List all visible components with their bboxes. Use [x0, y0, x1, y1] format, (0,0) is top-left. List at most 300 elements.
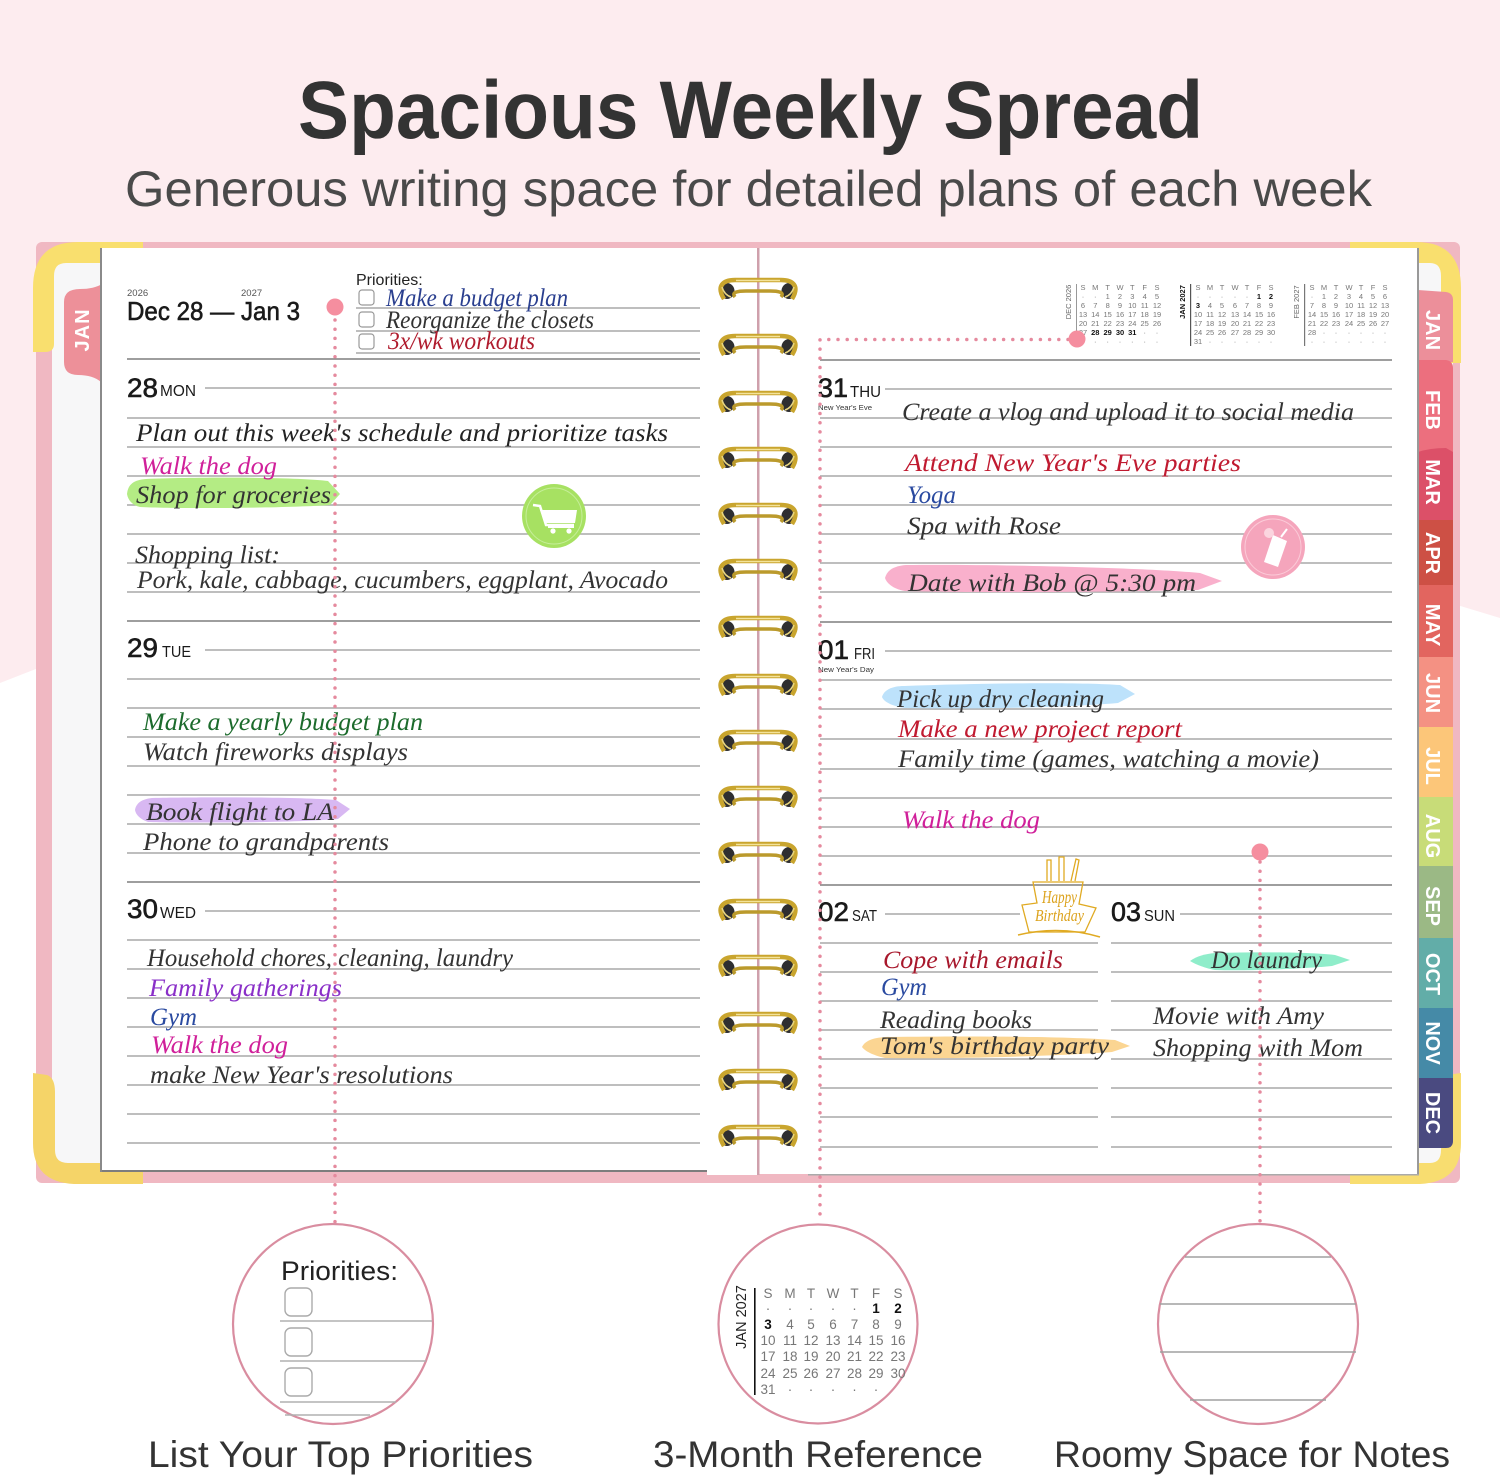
January 2027 calendar: 8 [1257, 301, 1261, 310]
callout circle: calendar: · [852, 1301, 857, 1316]
January 2027 calendar: · [1246, 337, 1248, 346]
callout circle: calendar: · [809, 1382, 813, 1397]
callout circle: calendar: · [809, 1301, 813, 1316]
callout circle: calendar: 15 [868, 1333, 884, 1348]
left page heavy dividers [127, 359, 700, 882]
February 2027 calendar: · [1384, 328, 1386, 337]
January 2027 calendar: · [1197, 292, 1199, 301]
February 2027 calendar: 11 [1357, 301, 1365, 310]
callout circle: calendar: 22 [868, 1349, 884, 1364]
January 2027 calendar: 9 [1269, 301, 1273, 310]
December 2026 calendar [1064, 283, 1161, 346]
caption: calendar: 3-Month Reference [653, 1434, 983, 1475]
callout circle: calendar: T [807, 1286, 815, 1301]
January 2027 calendar: T [1220, 283, 1225, 292]
title: Spacious Weekly Spread [298, 65, 1203, 156]
January 2027 calendar: 4 [1208, 301, 1212, 310]
February 2027 calendar: 28 [1308, 328, 1316, 337]
callout circle: calendar: 4 [786, 1317, 794, 1332]
February 2027 calendar: · [1348, 328, 1350, 337]
February 2027 calendar: 25 [1357, 319, 1365, 328]
December 2026 calendar: · [1106, 337, 1109, 346]
January 2027 calendar: 23 [1267, 319, 1275, 328]
callout circle: calendar: · [788, 1382, 792, 1397]
February 2027 calendar: 22 [1320, 319, 1328, 328]
January 2027 calendar: 11 [1206, 310, 1214, 319]
February 2027 calendar: · [1372, 337, 1374, 346]
February 2027 calendar: · [1335, 328, 1337, 337]
February 2027 calendar: 8 [1322, 301, 1326, 310]
day: 01 Friday: Make a new project report [897, 716, 1183, 743]
day: 31 Thursday: 31 [818, 373, 848, 403]
tab NOV: NOV [1421, 1021, 1443, 1065]
February 2027 calendar: 13 [1381, 301, 1389, 310]
December 2026 calendar: 14 [1091, 310, 1099, 319]
February 2027 calendar: 18 [1357, 310, 1365, 319]
December 2026 calendar: 30 [1116, 328, 1124, 337]
December 2026 calendar: · [1094, 337, 1097, 346]
day: 28 Monday: Plan out this week's schedule and prioritize tasks [135, 420, 668, 447]
January 2027 calendar: · [1221, 292, 1223, 301]
February 2027 calendar: 7 [1310, 301, 1314, 310]
December 2026 calendar: 23 [1116, 319, 1124, 328]
December 2026 calendar: 29 [1104, 328, 1112, 337]
day: 28 Monday: Shopping list: [135, 542, 280, 569]
left page [100, 248, 758, 1175]
callout circle: calendar: 10 [760, 1333, 776, 1348]
callout circle: calendar: 16 [890, 1333, 906, 1348]
callout circle: calendar: 9 [894, 1317, 902, 1332]
February 2027 calendar: 20 [1381, 310, 1389, 319]
December 2026 calendar: 22 [1104, 319, 1112, 328]
January 2027 calendar: 27 [1231, 328, 1239, 337]
callout circle: calendar: S [893, 1286, 903, 1301]
callout circle: calendar: 30 [890, 1366, 906, 1381]
February 2027 calendar: · [1311, 292, 1313, 301]
day: 03 Sunday: SUN [1144, 908, 1175, 925]
priorities box: Make a budget plan [385, 285, 568, 312]
priorities box [356, 272, 594, 355]
callout circle: calendar: 28 [847, 1366, 862, 1381]
left page ruled lines [127, 308, 700, 1143]
February 2027 calendar: 9 [1334, 301, 1338, 310]
December 2026 calendar: 2 [1118, 292, 1122, 301]
yellow metal corners [33, 242, 1461, 1184]
February 2027 calendar: 3 [1347, 292, 1351, 301]
callout circle: calendar: · [852, 1382, 857, 1397]
December 2026 calendar: T [1105, 283, 1110, 292]
date range header: Dec 28 — Jan 3 [127, 296, 300, 326]
day: 01 Friday: New Year's Day [818, 665, 874, 674]
day: 31 Thursday: Spa with Rose [907, 513, 1061, 540]
February 2027 calendar: 27 [1381, 319, 1389, 328]
December 2026 calendar: 17 [1128, 310, 1136, 319]
December 2026 calendar: 16 [1116, 310, 1124, 319]
December 2026 calendar: · [1156, 328, 1158, 337]
February 2027 calendar: 2 [1334, 292, 1338, 301]
December 2026 calendar: 24 [1128, 319, 1136, 328]
day: 31 Thursday: THU [850, 384, 881, 401]
day: 02 Saturday: 02 [818, 897, 849, 927]
callout circle: calendar: 11 [783, 1333, 797, 1348]
January 2027 calendar [1178, 283, 1275, 346]
day: 29 Tuesday: Book flight to LA [146, 799, 335, 826]
callout circle: calendar: 31 [760, 1382, 776, 1397]
day: 30 Wednesday [127, 894, 514, 1089]
day: 01 Friday: Family time (games, watching a movie) [897, 746, 1319, 773]
January 2027 calendar: 21 [1243, 319, 1251, 328]
day: 03 Sunday: Do laundry [1210, 947, 1323, 974]
February 2027 calendar: W [1345, 283, 1353, 292]
February 2027 calendar: · [1360, 328, 1362, 337]
day: 29 Tuesday: 29 [127, 633, 158, 663]
January 2027 calendar: · [1258, 337, 1260, 346]
February 2027 calendar: F [1371, 283, 1376, 292]
day: 01 Friday: Walk the dog [902, 807, 1040, 834]
tab JUN: JUN [1421, 673, 1443, 713]
icon: birthday cake [1018, 857, 1100, 937]
December 2026 calendar: · [1131, 337, 1134, 346]
callout circle: calendar: · [788, 1301, 792, 1316]
tab DEC: DEC [1421, 1092, 1443, 1134]
February 2027 calendar: 10 [1345, 301, 1353, 310]
January 2027 calendar: F [1257, 283, 1262, 292]
January 2027 calendar: 17 [1194, 319, 1202, 328]
day: 31 Thursday: New Year's Eve [818, 403, 872, 412]
highlighter marks [127, 478, 1350, 1058]
January 2027 calendar: 10 [1194, 310, 1202, 319]
January 2027 calendar: · [1246, 292, 1248, 301]
tab JUN [1418, 657, 1453, 727]
callout circle: priorities [233, 1224, 433, 1424]
spiral binding [720, 280, 796, 1146]
tab FEB [1418, 360, 1453, 452]
priorities box: Priorities: [356, 272, 423, 289]
February 2027 calendar: 14 [1308, 310, 1316, 319]
February 2027 calendar: 24 [1345, 319, 1353, 328]
December 2026 calendar: M [1092, 283, 1098, 292]
callout circle: calendar: S [763, 1286, 773, 1301]
December 2026 calendar: 12 [1153, 301, 1161, 310]
February 2027 calendar: · [1335, 337, 1337, 346]
February 2027 calendar: 26 [1369, 319, 1377, 328]
tab JAN [1418, 290, 1453, 362]
callout circle: calendar: 8 [872, 1317, 880, 1332]
day: 28 Monday [127, 373, 668, 594]
callout circle: calendar: 14 [847, 1333, 862, 1348]
February 2027 calendar: S [1309, 283, 1315, 292]
January 2027 calendar: 1 [1257, 292, 1261, 301]
caption: priorities: List Your Top Priorities [148, 1434, 533, 1475]
callout circle: calendar [718, 1224, 918, 1424]
spine [757, 248, 760, 1175]
date range header: 2026 [127, 288, 148, 299]
day: 31 Thursday: Create a vlog and upload it to social media [902, 399, 1354, 426]
February 2027 calendar: · [1372, 328, 1374, 337]
February 2027 calendar: 23 [1332, 319, 1340, 328]
December 2026 calendar: 28 [1091, 328, 1099, 337]
December 2026 calendar: 5 [1155, 292, 1159, 301]
February 2027 calendar: 4 [1359, 292, 1363, 301]
January 2027 calendar: · [1270, 337, 1272, 346]
December 2026 calendar: 11 [1141, 301, 1149, 310]
tab NOV [1418, 1008, 1453, 1078]
December 2026 calendar: · [1082, 292, 1084, 301]
caption: notes: Roomy Space for Notes [1054, 1434, 1450, 1475]
callout circle: calendar: · [831, 1301, 835, 1316]
February 2027 calendar: 19 [1369, 310, 1377, 319]
February 2027 calendar: FEB 2027 [1292, 285, 1301, 319]
tab JAN: JAN [1421, 310, 1443, 350]
callout circle: calendar: 12 [803, 1333, 819, 1348]
February 2027 calendar: 17 [1345, 310, 1353, 319]
callout circle: notes [1158, 1224, 1358, 1424]
callout circle: calendar: 6 [829, 1317, 837, 1332]
day: 30 Wednesday: Walk the dog [151, 1032, 288, 1059]
January 2027 calendar: S [1268, 283, 1274, 292]
day: 01 Friday: Pick up dry cleaning [896, 686, 1104, 713]
January 2027 calendar: 22 [1255, 319, 1263, 328]
callout circle: calendar: · [874, 1382, 878, 1397]
tab OCT [1418, 938, 1453, 1008]
January 2027 calendar: JAN 2027 [1178, 285, 1187, 319]
December 2026 calendar: S [1154, 283, 1160, 292]
January 2027 calendar: S [1195, 283, 1201, 292]
callout connector: calendar [820, 330, 1086, 1222]
callout circle: calendar: W [827, 1286, 840, 1301]
day: 03 Sunday: Shopping with Mom [1153, 1035, 1363, 1062]
callout circle: calendar: 13 [825, 1333, 841, 1348]
callout circle: calendar: 21 [847, 1349, 862, 1364]
tab AUG [1418, 797, 1453, 866]
day: 01 Friday: FRI [854, 646, 875, 663]
day: 28 Monday: Shop for groceries [136, 482, 331, 509]
day: 01 Friday [818, 635, 1319, 834]
December 2026 calendar: · [1119, 337, 1121, 346]
day: 02 Saturday [818, 897, 1110, 1060]
January 2027 calendar: 29 [1255, 328, 1263, 337]
December 2026 calendar: · [1156, 337, 1158, 346]
January 2027 calendar: · [1234, 292, 1236, 301]
right month tabs [1418, 290, 1453, 1148]
December 2026 calendar: 1 [1106, 292, 1110, 301]
January 2027 calendar: 31 [1194, 337, 1202, 346]
day: 31 Thursday: Date with Bob @ 5:30 pm [907, 570, 1196, 597]
callout circle: calendar: 26 [803, 1366, 819, 1381]
tab APR: APR [1421, 532, 1443, 575]
callout circle: calendar: 20 [825, 1349, 841, 1364]
December 2026 calendar: 19 [1153, 310, 1161, 319]
planner cover [36, 242, 1460, 1183]
January 2027 calendar: 20 [1231, 319, 1239, 328]
callout connector: priorities [326, 298, 344, 1225]
day: 30 Wednesday: Gym [150, 1004, 197, 1031]
callout circle: calendar: · [766, 1301, 770, 1316]
day: 29 Tuesday: TUE [162, 644, 191, 661]
day: 30 Wednesday: Family gatherings [148, 975, 342, 1002]
callout connector: notes [1252, 844, 1268, 1222]
day: 31 Thursday: Attend New Year's Eve parties [903, 450, 1241, 477]
tab SEP [1418, 866, 1453, 938]
day: 31 Thursday [818, 373, 1354, 597]
left JAN tab [64, 284, 102, 383]
tab AUG: AUG [1421, 814, 1443, 858]
December 2026 calendar: 21 [1091, 319, 1099, 328]
day: 28 Monday: Pork, kale, cabbage, cucumbers, eggplant, Avocado [136, 567, 668, 594]
callout circle: calendar: 27 [825, 1366, 841, 1381]
January 2027 calendar: 25 [1206, 328, 1214, 337]
December 2026 calendar: 15 [1104, 310, 1112, 319]
day: 03 Sunday: Movie with Amy [1152, 1003, 1325, 1030]
date range header: 2027 [241, 288, 262, 299]
priorities box: Reorganize the closets [385, 307, 594, 334]
day: 28 Monday: MON [160, 383, 196, 400]
December 2026 calendar: 25 [1141, 319, 1149, 328]
tab FEB: FEB [1421, 390, 1443, 430]
day: 28 Monday: Walk the dog [140, 453, 277, 480]
February 2027 calendar: 16 [1332, 310, 1340, 319]
December 2026 calendar: 20 [1079, 319, 1087, 328]
day: 03 Sunday [1111, 897, 1363, 1062]
December 2026 calendar: 4 [1143, 292, 1147, 301]
February 2027 calendar: 6 [1383, 292, 1387, 301]
December 2026 calendar: · [1143, 337, 1146, 346]
February 2027 calendar: 12 [1369, 301, 1377, 310]
February 2027 calendar: · [1311, 337, 1313, 346]
February 2027 calendar: · [1323, 328, 1325, 337]
January 2027 calendar: 13 [1231, 310, 1239, 319]
February 2027 calendar: · [1348, 337, 1350, 346]
tab JUL: JUL [1421, 747, 1443, 785]
January 2027 calendar: W [1231, 283, 1239, 292]
December 2026 calendar: 7 [1093, 301, 1097, 310]
tab JUL [1418, 727, 1453, 797]
January 2027 calendar: · [1209, 337, 1211, 346]
December 2026 calendar: DEC 2026 [1064, 285, 1073, 319]
December 2026 calendar: 26 [1153, 319, 1161, 328]
icon: shopping cart [522, 484, 586, 548]
December 2026 calendar: 27 [1079, 328, 1087, 337]
February 2027 calendar: · [1384, 337, 1386, 346]
January 2027 calendar: M [1207, 283, 1213, 292]
December 2026 calendar: 31 [1128, 328, 1136, 337]
February 2027 calendar [1292, 283, 1389, 346]
callout circle: calendar: JAN 2027 [734, 1285, 750, 1349]
February 2027 calendar: 15 [1320, 310, 1328, 319]
day: 02 Saturday: Tom's birthday party [880, 1033, 1110, 1060]
callout circle: calendar: 2 [894, 1301, 902, 1316]
December 2026 calendar: · [1143, 328, 1146, 337]
February 2027 calendar: T [1334, 283, 1339, 292]
February 2027 calendar: T [1359, 283, 1364, 292]
tab MAY: MAY [1421, 604, 1443, 647]
January 2027 calendar: 2 [1269, 292, 1273, 301]
tab APR [1418, 520, 1453, 585]
right page heavy dividers [820, 360, 1392, 885]
day: 02 Saturday: Gym [881, 974, 927, 1001]
December 2026 calendar: · [1094, 292, 1097, 301]
day: 29 Tuesday: Make a yearly budget plan [142, 709, 423, 736]
day: 30 Wednesday: Household chores, cleaning, laundry [146, 945, 514, 972]
callout circle: calendar: T [850, 1286, 859, 1301]
tab OCT: OCT [1421, 953, 1443, 995]
January 2027 calendar: · [1234, 337, 1236, 346]
day: 29 Tuesday: Phone to grandparents [142, 829, 389, 856]
January 2027 calendar: T [1245, 283, 1250, 292]
day: 30 Wednesday: 30 [127, 894, 158, 924]
December 2026 calendar: W [1116, 283, 1124, 292]
tab MAY [1418, 585, 1453, 657]
day: 30 Wednesday: WED [160, 905, 196, 922]
December 2026 calendar: 8 [1106, 301, 1110, 310]
January 2027 calendar: 19 [1218, 319, 1226, 328]
day: 02 Saturday: SAT [852, 908, 877, 925]
day: 02 Saturday: Cope with emails [883, 947, 1063, 974]
callout circle: calendar: 5 [807, 1317, 815, 1332]
day: 30 Wednesday: make New Year's resolutions [150, 1062, 453, 1089]
January 2027 calendar: 15 [1255, 310, 1263, 319]
day: 29 Tuesday [127, 633, 423, 856]
tab MAR: MAR [1421, 459, 1443, 505]
February 2027 calendar: M [1321, 283, 1327, 292]
callout circle: calendar: · [831, 1382, 835, 1397]
tab MAR [1418, 448, 1453, 520]
February 2027 calendar: 21 [1308, 319, 1316, 328]
callout circle: calendar: 18 [782, 1349, 798, 1364]
tab DEC [1418, 1078, 1453, 1148]
January 2027 calendar: 3 [1196, 301, 1200, 310]
February 2027 calendar: 1 [1322, 292, 1326, 301]
December 2026 calendar: 18 [1141, 310, 1149, 319]
December 2026 calendar: 6 [1081, 301, 1085, 310]
January 2027 calendar: 24 [1194, 328, 1202, 337]
callout circle: calendar: 19 [803, 1349, 819, 1364]
callout circle: calendar: 7 [851, 1317, 858, 1332]
callout circle: calendar: 23 [890, 1349, 906, 1364]
callout circle: calendar: M [784, 1286, 796, 1301]
January 2027 calendar: · [1209, 292, 1211, 301]
December 2026 calendar: S [1080, 283, 1086, 292]
January 2027 calendar: 12 [1218, 310, 1226, 319]
callout circle: calendar: 29 [868, 1366, 884, 1381]
day: 29 Tuesday: Watch fireworks displays [143, 739, 408, 766]
January 2027 calendar: 18 [1206, 319, 1214, 328]
icon: birthday cake: Birthday [1035, 906, 1084, 925]
callout circle: calendar: 1 [872, 1301, 880, 1316]
day: 28 Monday: 28 [127, 373, 158, 403]
day: 31 Thursday: Yoga [907, 482, 956, 509]
January 2027 calendar: 7 [1245, 301, 1249, 310]
right page [759, 248, 1419, 1176]
day: 03 Sunday: 03 [1111, 897, 1141, 927]
December 2026 calendar: F [1142, 283, 1147, 292]
January 2027 calendar: 5 [1220, 301, 1224, 310]
tab SEP: SEP [1421, 886, 1443, 926]
January 2027 calendar: 14 [1243, 310, 1251, 319]
callout circle: calendar: 25 [782, 1366, 798, 1381]
day: 01 Friday: 01 [818, 635, 849, 665]
December 2026 calendar: 13 [1079, 310, 1087, 319]
January 2027 calendar: 28 [1243, 328, 1251, 337]
callout circle: calendar: F [872, 1286, 880, 1301]
icon: birthday cake: Happy [1041, 887, 1077, 907]
callout circle: priorities: Priorities: [281, 1256, 398, 1286]
January 2027 calendar: · [1221, 337, 1223, 346]
left JAN tab: JAN [72, 308, 94, 352]
callout circle: calendar: 3 [764, 1317, 772, 1332]
January 2027 calendar: 30 [1267, 328, 1275, 337]
callout circle: calendar: 17 [760, 1349, 776, 1364]
